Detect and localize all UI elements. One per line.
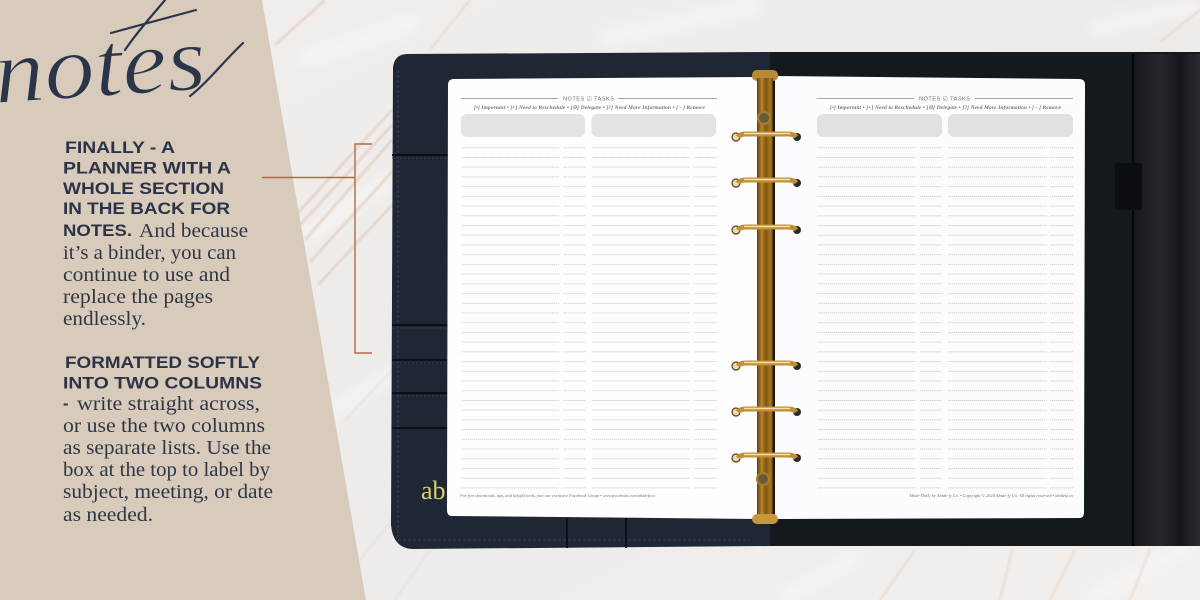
label boxes [817,114,1073,137]
text block: two columns: FORMATTED SOFTLY [65,354,260,372]
footer note: For free downloads, tips, and helpful tools, join our exclusive Facebook Group • www.facebook.com/abidelyco [459,493,656,499]
text block: finally a planner: it’s a binder, you can [63,242,236,264]
ruled lines [461,147,717,489]
gold foil logo: ab [421,476,446,505]
gold rings [732,133,801,462]
page: left notes page [447,77,757,519]
panel: beige side panel [0,0,366,600]
page header: NOTES ☑ TASKS [563,96,614,102]
text block: finally a planner [63,139,248,330]
text block: finally a planner: PLANNER WITH A [63,160,231,178]
text block: two columns: as separate lists. Use the [63,437,271,459]
page header [817,96,1073,111]
text block: two columns: - [63,395,68,413]
strap loop [1115,163,1142,210]
page header [461,96,717,111]
text block: finally a planner: WHOLE SECTION [63,180,224,198]
page header: NOTES ☑ TASKS [919,96,970,102]
text block: finally a planner: IN THE BACK FOR [63,200,230,218]
ruled lines [817,147,1073,489]
text block: two columns: box at the top to label by [63,459,270,481]
text block: two columns: or use the two columns [63,415,265,437]
text block: two columns: as needed. [63,504,153,526]
text block: finally a planner: continue to use and [63,264,230,286]
text block: finally a planner: FINALLY - A [65,139,175,157]
label boxes [461,114,716,137]
text block: finally a planner: NOTES. [63,222,132,240]
binder cover [391,52,1200,549]
text block: finally a planner: replace the pages [63,286,213,308]
footer note: Abide-Daily by Abide-ly Co. • Copyright © 2024 Abide-ly Co. All rights reserved • abidely.co [908,493,1074,498]
page header: [•] Important • [+] Need to Reschedule • [⊙] Delegate • [?] Need More Information • [ - ] Remove [474,105,706,111]
text block: finally a planner: And because [139,220,248,242]
binder rings spine [732,70,801,524]
text block: two columns: INTO TWO COLUMNS [63,374,262,392]
text block: two columns: write straight across, [77,393,260,415]
callout bracket [262,144,372,353]
text block: two columns [63,354,273,526]
page: right notes page [775,76,1085,519]
page header: [•] Important • [+] Need to Reschedule • [⊙] Delegate • [?] Need More Information • [ - ] Remove [830,105,1062,111]
text block: two columns: subject, meeting, or date [63,481,273,503]
text block: finally a planner: endlessly. [63,308,146,330]
